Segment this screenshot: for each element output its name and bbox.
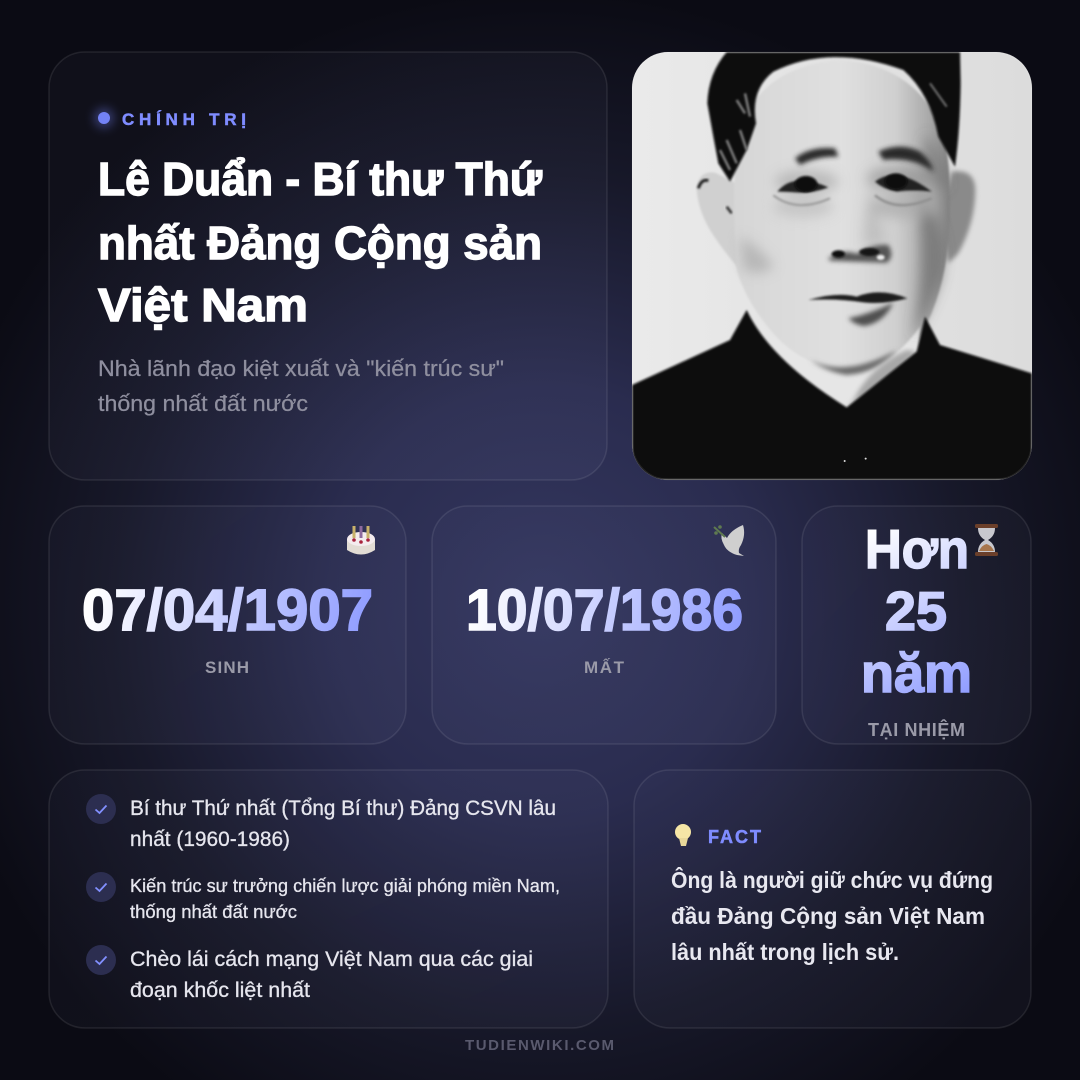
panel: hero [49, 52, 607, 480]
subtitle [98, 356, 504, 416]
title: Lê Duẩn - Bí thư Thứ [98, 153, 543, 205]
icon: hourglass [975, 524, 998, 556]
list item 3: Chèo lái cách mạng Việt Nam qua các giai [130, 948, 533, 971]
tenure value: 25 [885, 580, 947, 642]
stat card: birth [49, 506, 406, 744]
panel: achievements list [49, 770, 608, 1028]
title: Việt Nam [98, 279, 308, 331]
label: birth: SINH [205, 658, 249, 677]
list item 1: Bí thư Thứ nhất (Tổng Bí thư) Đảng CSVN lâu [130, 797, 556, 820]
stat card: tenure [802, 506, 1031, 744]
label: death: MẤT [584, 658, 625, 677]
subtitle: thống nhất đất nước [98, 391, 308, 416]
footer: TUDIENWIKI.COM [465, 1037, 614, 1054]
label: tenure: TẠI NHIỆM [868, 719, 965, 740]
tenure value: năm [861, 642, 972, 704]
list item 2: Kiến trúc sư trưởng chiến lược giải phóng miền Nam, [130, 876, 560, 896]
category label: CHÍNH TRỊ [122, 110, 246, 129]
list item 1: nhất (1960-1986) [130, 828, 290, 851]
icon: dove [714, 525, 744, 556]
tenure value: Hơn [865, 518, 969, 580]
fact text [671, 866, 993, 965]
icon: light bulb [675, 824, 691, 846]
list item 3: đoạn khốc liệt nhất [130, 979, 310, 1002]
cheek and temple shading [740, 133, 947, 337]
list item 2: thống nhất đất nước [130, 902, 297, 922]
fact label: FACT [708, 827, 761, 847]
title [98, 153, 543, 331]
date: death: 10/07/1986 [466, 578, 743, 643]
icon: birthday cake [347, 526, 375, 554]
date: birth: 07/04/1907 [82, 578, 373, 643]
title: nhất Đảng Cộng sản [98, 217, 542, 269]
stat card: death [432, 506, 776, 744]
subtitle: Nhà lãnh đạo kiệt xuất và "kiến trúc sư" [98, 356, 504, 381]
portrait photo [632, 52, 1032, 480]
panel: fact [634, 770, 1031, 1028]
fact text: lâu nhất trong lịch sử. [671, 939, 899, 965]
fact text: Ông là người giữ chức vụ đứng [671, 866, 993, 893]
list item 3 [86, 945, 533, 1002]
fact text: đầu Đảng Cộng sản Việt Nam [671, 903, 985, 929]
list item 1 [86, 794, 556, 851]
list item 2 [86, 872, 560, 922]
tenure value [861, 518, 972, 704]
